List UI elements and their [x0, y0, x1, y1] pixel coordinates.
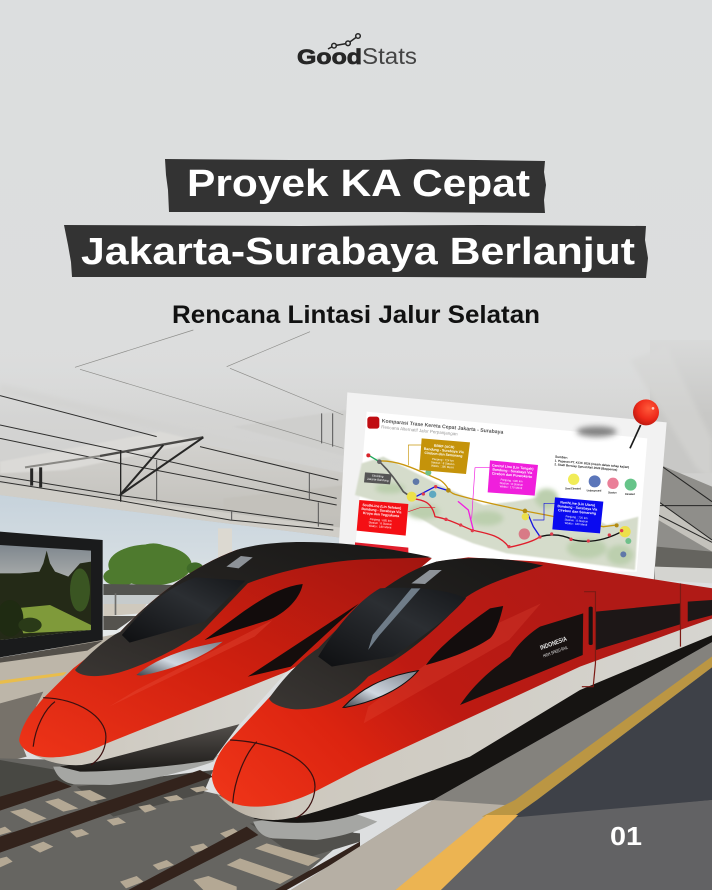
trains — [19, 542, 712, 840]
route map paper — [337, 392, 667, 585]
title line 2 tape — [64, 225, 648, 278]
blurred redaction — [577, 426, 617, 437]
front train undercarriage — [253, 633, 712, 823]
video screen — [0, 532, 103, 657]
rear train windscreen — [122, 577, 245, 643]
heading icon — [367, 417, 379, 429]
route box: BBRF: Cirebon dan Semarang — [424, 451, 463, 458]
front train passenger windows — [596, 603, 680, 650]
route box: central line: Central Line (Lin Tengah) — [492, 463, 534, 471]
legend dots: Elevated — [625, 493, 635, 496]
source notes: Sumber: — [555, 455, 568, 460]
title line 1 tape: Proyek KA Cepat — [187, 163, 530, 205]
train side lettering: INDONESIA — [539, 636, 568, 652]
trees — [103, 543, 203, 586]
second red box sliver — [355, 542, 408, 558]
map relief — [375, 483, 633, 565]
pin — [630, 399, 659, 448]
rear train nose seam — [33, 698, 106, 765]
near platform surface — [0, 633, 120, 707]
station markers — [366, 453, 631, 557]
platform shadow strip — [0, 641, 103, 663]
route box: south line: Bandung - Surabaya Via — [361, 507, 402, 514]
station canopy right — [630, 340, 712, 583]
logo: Good — [297, 46, 362, 69]
rear train white band — [27, 672, 287, 765]
route box: south line: Kroya dan Yogyakarta — [363, 511, 400, 518]
rear train roof hatch — [226, 556, 253, 568]
ballast — [0, 758, 360, 890]
fence and far platform — [103, 584, 180, 630]
front train nose seam — [230, 740, 315, 818]
printed page — [353, 412, 647, 572]
legend dots — [565, 474, 637, 496]
subtitle: Rencana Lintasi Jalur Selatan — [172, 301, 540, 329]
front train headlight — [343, 671, 418, 707]
route box: central line: Cirebon dan Purwokerto — [492, 471, 532, 479]
route box: south line: Panjang : 685 km — [370, 517, 392, 523]
route box: south line: SouthLine (Lin Selatan) — [362, 503, 401, 510]
route box: north line: Bandung - Surabaya Via — [557, 504, 598, 512]
rear train — [19, 542, 432, 785]
rear train undercarriage — [60, 723, 240, 772]
start point label: Jakarta-Bandung — [367, 477, 389, 483]
route box: BBRF: Bandung - Surabaya Via — [424, 447, 464, 454]
source notes — [554, 455, 630, 473]
right platform — [291, 642, 712, 890]
rear train hood — [75, 542, 432, 676]
front train silver skirt — [253, 813, 377, 840]
title line 1 tape — [165, 159, 546, 213]
front train roof hatch — [411, 570, 442, 584]
route box: BBRF: Waktu : 180 Menit — [431, 464, 454, 470]
front train door — [582, 583, 680, 687]
route box: north line: Stasiun : 8 Stasiun — [564, 518, 589, 524]
route box: BBRF — [419, 438, 470, 474]
page number: 01 — [610, 821, 642, 851]
logo trend line — [328, 34, 360, 49]
route box: BBRF: Panjang : 724 km — [432, 457, 455, 463]
legend dots: Underground — [587, 490, 602, 492]
map heading: Komparasi Trase Kereta Cepat Jakarta - Surabaya — [381, 418, 504, 436]
rear train side stripe — [248, 603, 359, 677]
source notes: 2. Studi Bersiap Speed Rail 2024 (Bappenas) — [554, 462, 618, 472]
legend dots: Semi Elevated — [565, 488, 581, 491]
rear train silver skirt — [53, 755, 218, 785]
front train hood — [269, 558, 543, 709]
rear train body — [19, 543, 432, 757]
paper sheet — [337, 392, 667, 585]
train side lettering: HIGH SPEED RAIL — [542, 645, 569, 658]
route box: central line: Panjang : 690 km — [500, 478, 523, 484]
route box: south line: Waktu : 180 Menit — [369, 524, 392, 530]
route box: central line — [488, 460, 538, 496]
route box: north line: Cirebon dan Semarang — [558, 508, 596, 516]
track bed and rails — [0, 660, 360, 890]
rails — [0, 770, 360, 890]
front train windscreen — [318, 588, 466, 667]
route box: north line — [552, 497, 603, 533]
left platform — [0, 660, 78, 763]
front train body highlight — [364, 603, 541, 723]
front train white band — [214, 618, 712, 820]
distant scene: screen, tree, fence — [0, 528, 232, 707]
source notes: 1. Paparan PT. KCIC 2024 (masih dalam tahap kajian) — [555, 459, 629, 469]
route box: BBRF: BBRF (ACR) — [434, 444, 455, 449]
top fade into page colour — [0, 325, 712, 415]
route box: south line: Stasiun : 8 Stasiun — [368, 520, 393, 526]
logo — [297, 34, 417, 69]
routes — [369, 445, 623, 547]
pillar — [218, 528, 232, 568]
legend dots: Stasiun — [608, 492, 617, 495]
route box: south line — [357, 500, 408, 536]
front train side window — [426, 606, 503, 665]
title line 2 tape: Jakarta-Surabaya Berlanjut — [81, 231, 635, 273]
station canopy left — [0, 383, 347, 538]
route box: central line: Stasiun : 8 Stasiun — [499, 481, 524, 487]
logo: Stats — [362, 43, 417, 69]
front train — [212, 557, 712, 840]
rear train side window — [205, 584, 303, 640]
start point label — [364, 472, 392, 484]
right side wires — [658, 467, 712, 542]
overhead wires and gantry — [0, 330, 343, 530]
route box: north line: Waktu : 180 Menit — [565, 521, 588, 527]
train side lettering — [539, 636, 571, 658]
route box: BBRF: Stasiun : 8 Stasiun — [431, 460, 455, 466]
route box: north line: Panjang : 720 km — [565, 514, 588, 520]
rear train body highlight — [109, 620, 273, 707]
background and ceiling — [0, 0, 712, 560]
sleepers — [0, 786, 320, 890]
sky — [0, 480, 470, 670]
map land — [355, 457, 638, 570]
front train body — [212, 557, 712, 807]
route box: central line: Bandung - Surabaya Via — [492, 468, 533, 475]
route box: central line: Waktu : 170 Menit — [500, 484, 523, 490]
map heading: Rencana Alternatif Jalur Perpanjangan — [381, 424, 458, 437]
route box: north line: NorthLine (Lin Utara) — [560, 500, 595, 507]
front train side stripe — [460, 613, 583, 705]
start point label: Eksisting — [372, 474, 384, 479]
rear train headlight — [136, 642, 223, 676]
